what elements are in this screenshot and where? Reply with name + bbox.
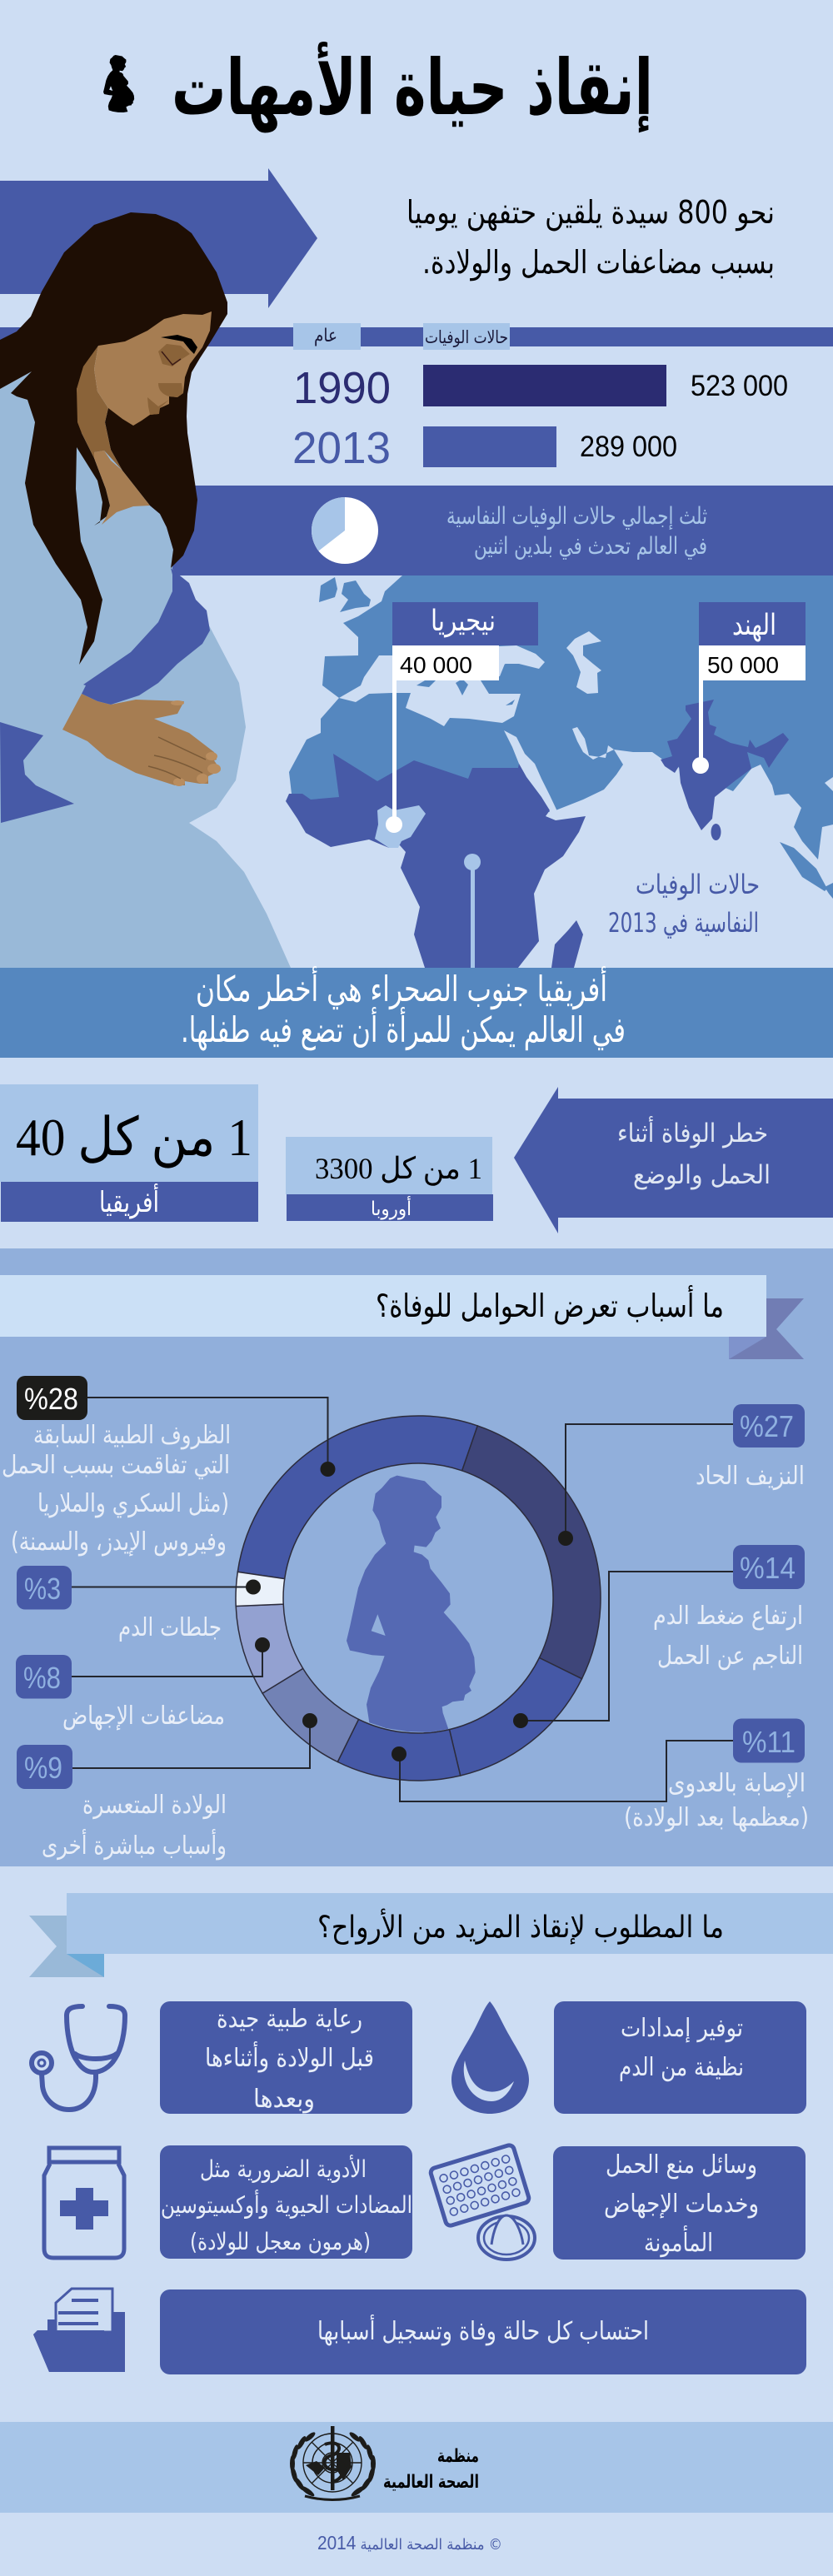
value 2013: 289 000 — [580, 431, 677, 463]
cause: 14 percent — [653, 1545, 805, 1671]
cause: 9 percent: الولادة المتعسرة — [82, 1791, 227, 1820]
box: good medical care: رعاية طبية جيدة — [217, 2005, 362, 2034]
map pin: Sub-Saharan Africa — [464, 854, 481, 968]
footer band — [0, 2422, 833, 2513]
box: essential medicines — [160, 2145, 412, 2259]
land: Sumatra — [780, 842, 827, 891]
intro text: نحو 800 سيدة يلقين حتفهن يوميا — [407, 194, 775, 232]
leader dots — [246, 1462, 573, 1761]
land: UK and Ireland — [319, 577, 371, 612]
year 2013: 2013 — [292, 423, 391, 473]
cause: 11 percent: (معظمها بعد الولادة) — [624, 1803, 809, 1832]
sea: Red Sea — [504, 730, 560, 819]
eye shadow — [158, 344, 190, 366]
intro text — [407, 194, 775, 282]
box: family planning — [553, 2146, 806, 2260]
pie caption: في العالم تحدث في بلدين اثنين — [474, 532, 707, 560]
heading: what is needed: ما المطلوب لإنقاذ المزيد من الأرواح؟ — [317, 1908, 724, 1945]
hair — [0, 212, 227, 665]
pregnant silhouette — [347, 1476, 476, 1732]
box: family planning: المأمونة — [644, 2225, 713, 2258]
icon: contraceptive pills and condom — [430, 2144, 535, 2260]
box: essential medicines: المضادات الحيوية وأوكسيتوسين — [161, 2189, 412, 2219]
map: Madagascar — [551, 920, 583, 968]
cause: 14 percent: الناجم عن الحمل — [657, 1642, 803, 1671]
cause: 11 percent — [624, 1719, 809, 1832]
box: Europe: 1 من كل 3300 — [315, 1152, 482, 1186]
map caption — [608, 869, 760, 939]
callout: Nigeria: نيجيريا — [431, 605, 496, 638]
panel: risk of death — [0, 1084, 833, 1233]
value 1990: 523 000 — [691, 370, 788, 402]
leader lines — [72, 1398, 733, 1801]
cause: 28 percent: وفيروس الإيدز، والسمنة) — [11, 1527, 227, 1557]
eyebrow — [161, 335, 197, 354]
WHO name: الصحة العالمية — [383, 2472, 479, 2493]
cause: 28 percent: الظروف الطبية السابقة — [33, 1421, 231, 1450]
dress — [0, 371, 291, 968]
map: world land — [286, 575, 833, 899]
panel: sub-Saharan Africa statement — [0, 966, 833, 1058]
box: clean blood supplies: توفير إمدادات — [621, 2014, 743, 2043]
column header: deaths: حالات الوفيات — [425, 327, 508, 347]
cause: 27 percent: %27 — [740, 1409, 794, 1443]
right sleeve — [82, 568, 210, 705]
cause: 11 percent: الإصابة بالعدوى — [668, 1769, 806, 1798]
box: Africa: 1 من كل 40 — [16, 1108, 252, 1168]
sea: Caspian — [566, 631, 601, 694]
WHO logo — [290, 2426, 376, 2500]
map caption: النفاسية في 2013 — [608, 907, 759, 939]
neck shade — [77, 346, 122, 471]
icon: medicine jar — [44, 2148, 124, 2258]
illustration: pregnant woman — [0, 212, 291, 968]
cause: 9 percent: وأسباب مباشرة أخرى — [42, 1828, 227, 1861]
donut chart — [236, 1416, 601, 1781]
callout: India: الهند — [732, 609, 776, 642]
cause: 28 percent: %28 — [24, 1382, 78, 1416]
arrow: risk label — [514, 1087, 833, 1233]
box: Africa: أفريقيا — [99, 1183, 159, 1219]
hand — [62, 694, 221, 786]
box: Africa — [0, 1084, 258, 1222]
heading: causes: ما أسباب تعرض الحوامل للوفاة؟ — [376, 1285, 724, 1325]
cause: 3 percent: %3 — [24, 1572, 61, 1606]
column header: deaths — [423, 323, 510, 350]
cause: 9 percent: %9 — [24, 1751, 62, 1785]
panel: two countries — [0, 486, 833, 575]
copyright: © منظمة الصحة العالمية 2014 — [317, 2532, 502, 2554]
title: إنقاذ حياة الأمهات — [172, 42, 653, 133]
box: Europe: أوروبا — [371, 1196, 412, 1220]
ribbon: what is needed — [29, 1916, 104, 1977]
WHO name: منظمة — [437, 2446, 479, 2467]
map: India — [661, 700, 789, 840]
cause: 28 percent: (مثل السكري والملاريا — [37, 1489, 229, 1518]
box: essential medicines: (هرمون معجل للولادة) — [190, 2228, 371, 2255]
map: Nigeria — [375, 805, 426, 848]
map: Sri Lanka — [711, 824, 721, 840]
wreath left — [290, 2431, 317, 2498]
callout: Nigeria — [386, 602, 538, 833]
heading: what is needed — [67, 1893, 833, 1954]
pie caption — [446, 502, 707, 560]
sea: Black Sea — [499, 645, 545, 669]
ribbon — [729, 1298, 804, 1359]
column header: year: عام — [314, 326, 337, 346]
cause: 8 percent: مضاعفات الإجهاض — [62, 1702, 225, 1731]
eyelash — [162, 351, 181, 365]
callout: India: 50 000 — [707, 652, 779, 678]
bar 1990 — [423, 365, 666, 406]
icon: folder with records — [33, 2289, 125, 2372]
sea: Persian Gulf — [572, 727, 614, 760]
cause: 11 percent: %11 — [742, 1725, 796, 1759]
arrow: risk label: الحمل والوضع — [633, 1160, 771, 1190]
pie: one third — [312, 497, 378, 564]
cause: 27 percent — [696, 1404, 805, 1491]
box: clean blood supplies: نظيفة من الدم — [619, 2053, 744, 2082]
box: good medical care: وبعدها — [253, 2085, 315, 2114]
box: family planning: وخدمات الإجهاض — [604, 2190, 759, 2219]
cause: 14 percent: ارتفاع ضغط الدم — [653, 1602, 803, 1631]
cause: 3 percent — [17, 1566, 222, 1642]
cause: 27 percent: النزيف الحاد — [696, 1462, 805, 1491]
neck — [94, 451, 150, 525]
box: counting deaths — [160, 2290, 806, 2374]
cause: 8 percent — [16, 1655, 225, 1731]
cause: 14 percent: %14 — [740, 1551, 796, 1585]
face — [94, 311, 212, 426]
panel: sub-Saharan Africa statement: أفريقيا جنوب الصحراء هي أخطر مكان — [196, 966, 607, 1010]
column header: year — [293, 323, 361, 350]
arrow: intro banner — [0, 168, 317, 308]
cause: 3 percent: جلطات الدم — [118, 1613, 222, 1642]
cause: 8 percent: %8 — [23, 1661, 61, 1695]
callout: India — [692, 602, 806, 774]
box: clean blood supplies — [554, 2001, 806, 2114]
box: family planning: وسائل منع الحمل — [606, 2150, 757, 2180]
WHO name — [383, 2446, 479, 2493]
box: counting deaths: احتساب كل حالة وفاة وتسجيل أسبابها — [317, 2314, 649, 2346]
map caption: حالات الوفيات — [636, 869, 760, 900]
bar 2013 — [423, 426, 556, 467]
cause: 28 percent — [2, 1376, 231, 1557]
pie caption: ثلث إجمالي حالات الوفيات النفاسية — [446, 502, 707, 530]
cause: 28 percent: التي تفاقمت بسبب الحمل — [2, 1451, 230, 1480]
icon: stethoscope — [32, 2006, 125, 2110]
cause: 9 percent — [17, 1745, 227, 1861]
heading: causes — [0, 1275, 766, 1337]
arrow: risk label: خطر الوفاة أثناء — [617, 1116, 768, 1148]
bar chart: maternal deaths by year — [0, 323, 833, 473]
box: essential medicines: الأدوية الضرورية مثل — [200, 2154, 367, 2183]
callout: Nigeria: 40 000 — [400, 652, 472, 678]
sea: Mediterranean — [339, 655, 521, 726]
wreath right — [348, 2431, 376, 2498]
icon: pregnant woman silhouette — [103, 55, 134, 112]
panel: sub-Saharan Africa statement: في العالم يمكن للمرأة أن تضع فيه طفلها. — [181, 1007, 626, 1051]
box: Europe — [286, 1137, 493, 1221]
left sleeve — [0, 722, 74, 823]
panel: causes of death — [0, 1248, 833, 1866]
nose and lips shade — [147, 383, 183, 415]
land: Italy and Greece patches — [416, 679, 515, 705]
map: sub-Saharan Africa — [286, 754, 586, 968]
box: good medical care: قبل الولادة وأثناءها — [205, 2040, 374, 2073]
box: good medical care — [160, 2001, 412, 2114]
year 1990: 1990 — [293, 363, 391, 413]
icon: blood drop — [451, 2001, 529, 2114]
